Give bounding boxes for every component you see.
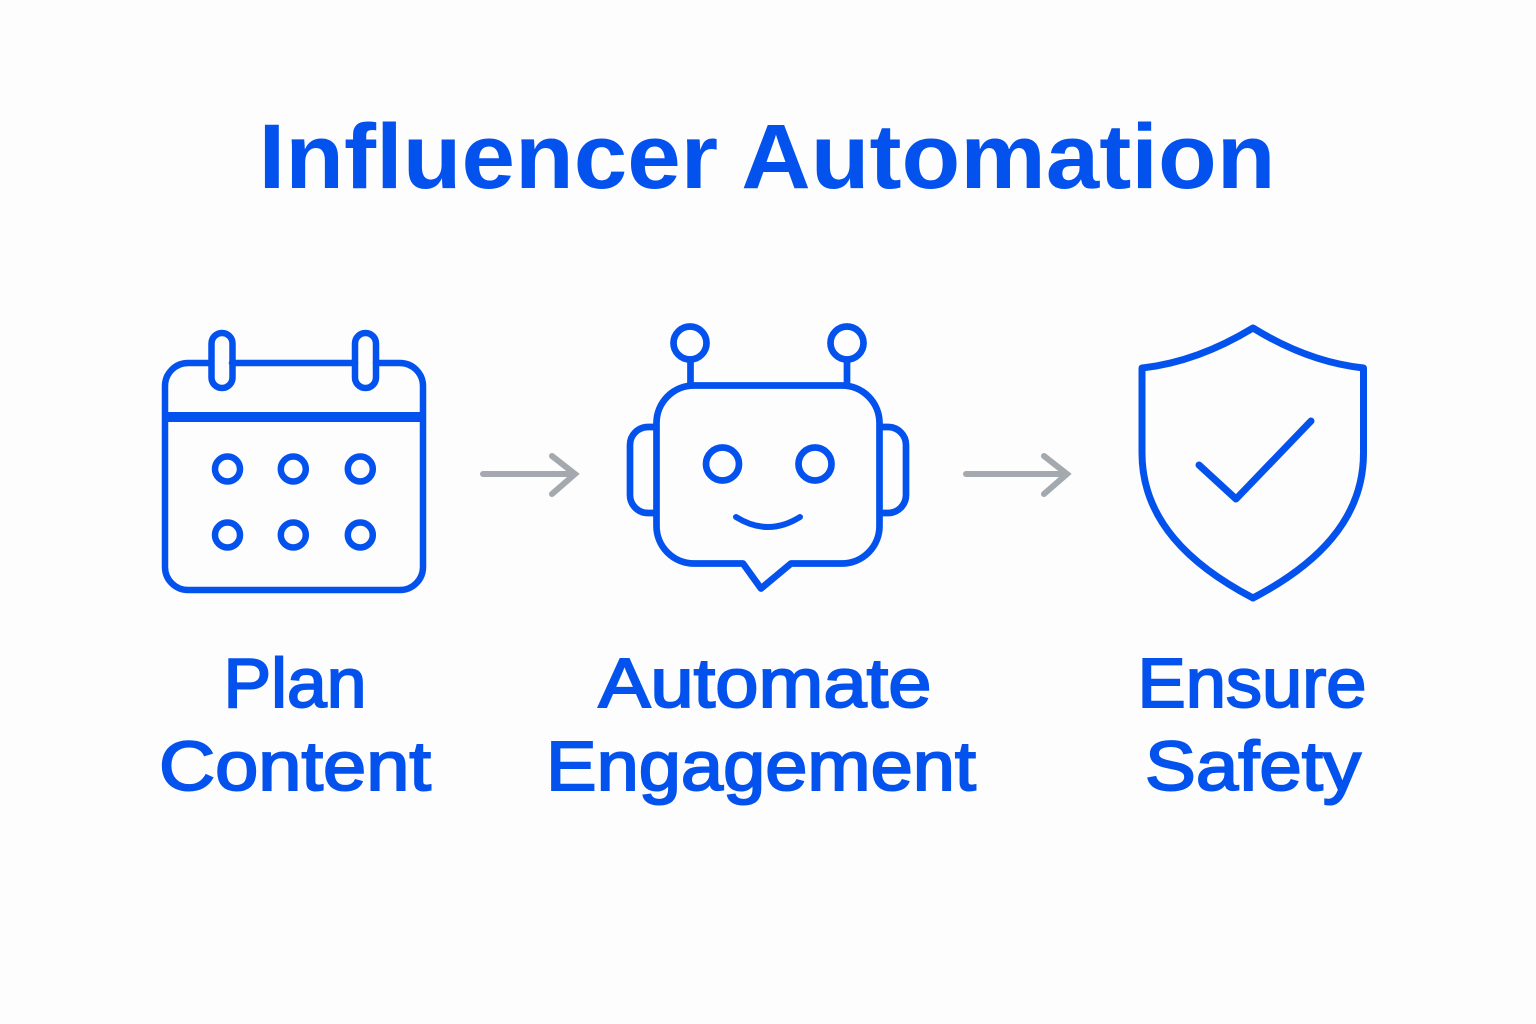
- label: automate engagement: Automate: [598, 644, 932, 722]
- label: automate engagement: [546, 644, 976, 805]
- label: automate engagement: Engagement: [546, 727, 976, 805]
- icon: calendar: [165, 333, 423, 590]
- title: Influencer Automation: [258, 106, 1276, 208]
- label: plan content: Plan: [224, 644, 366, 722]
- label: ensure safety: Safety: [1145, 727, 1361, 805]
- icon: robot: [630, 326, 906, 588]
- label: ensure safety: [1138, 644, 1366, 805]
- label: ensure safety: Ensure: [1138, 644, 1366, 722]
- label: plan content: [159, 644, 431, 805]
- label: plan content: Content: [159, 727, 431, 805]
- icon: shield with check: [1142, 328, 1364, 598]
- arrow: automate to ensure: [966, 456, 1067, 494]
- arrow: plan to automate: [483, 456, 575, 494]
